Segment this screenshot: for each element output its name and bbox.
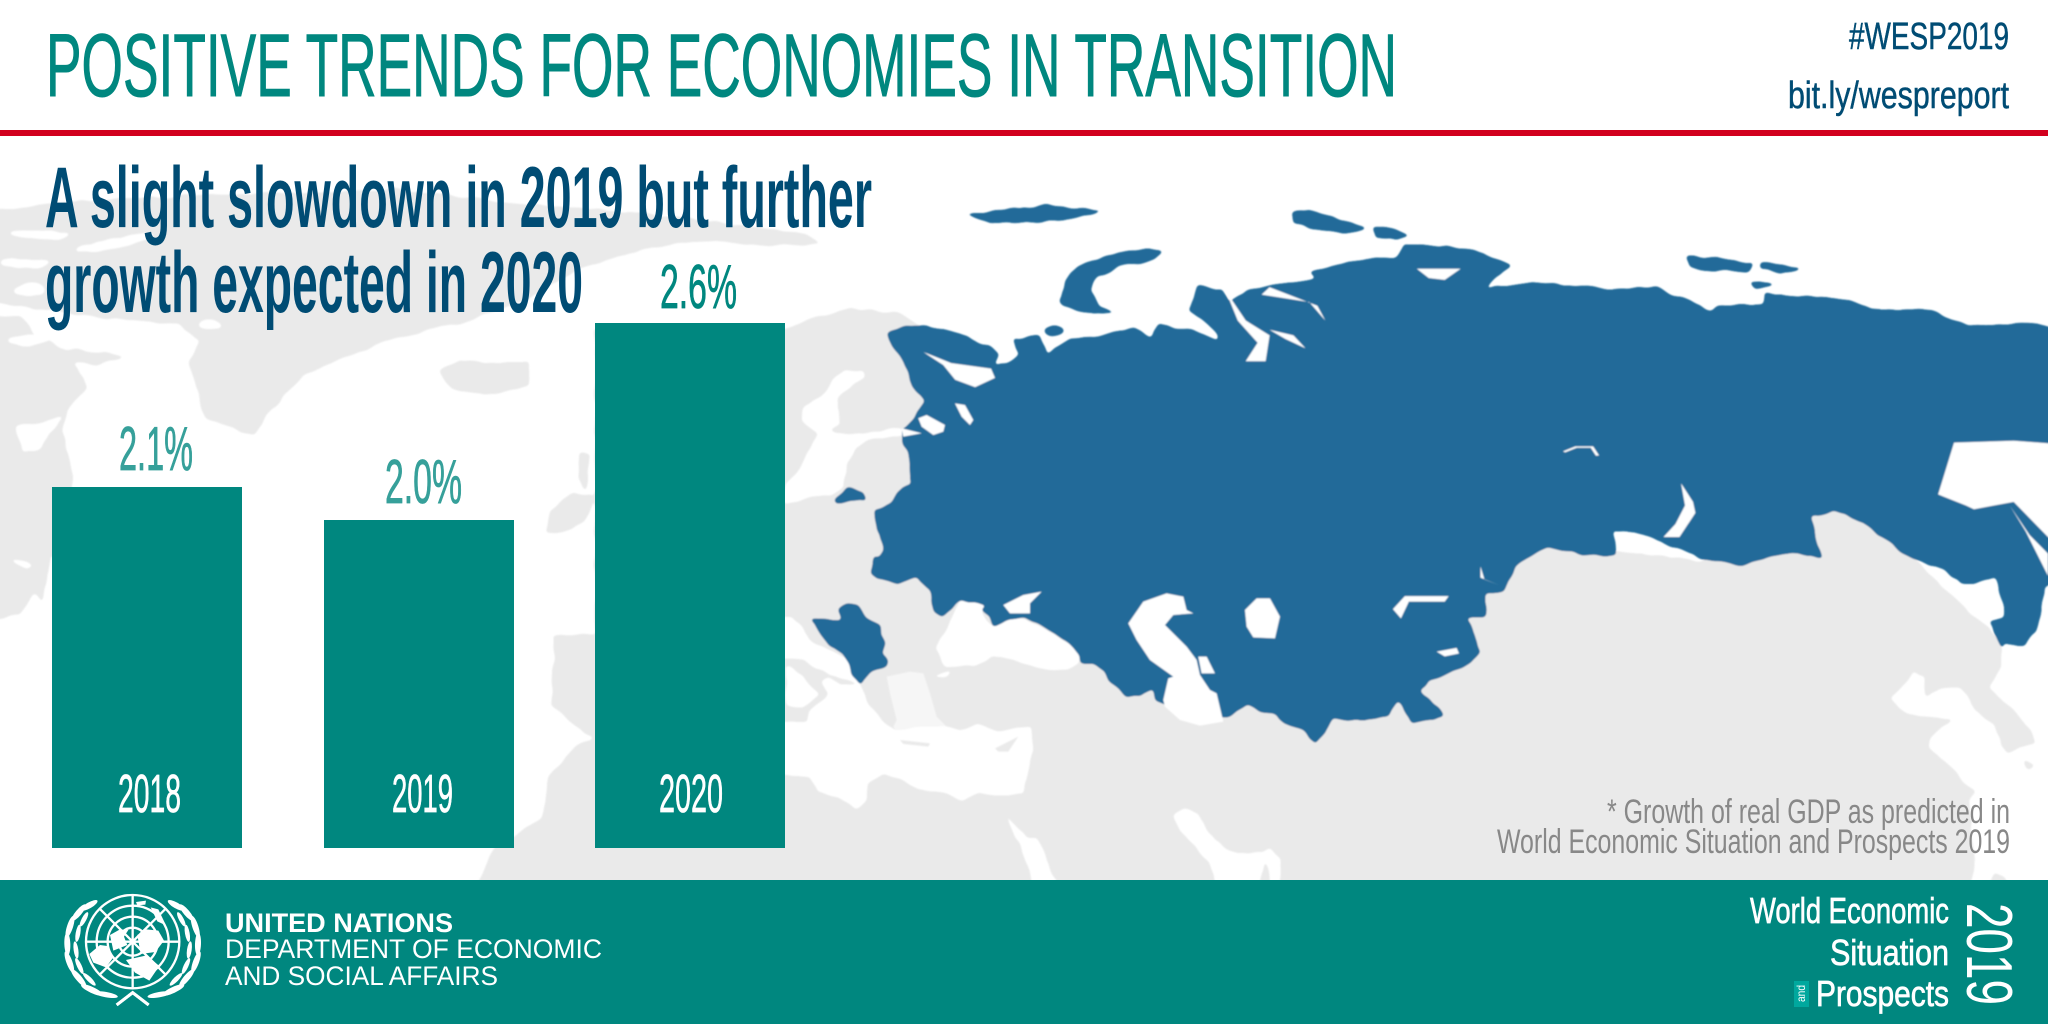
headline	[45, 150, 872, 331]
footer band	[0, 880, 2048, 1024]
bar 2019: 2019	[392, 764, 453, 824]
map: white seas and lakes over grey land	[0, 230, 1280, 893]
map: Aegean islands speckle	[887, 672, 947, 740]
bar 2020: 2020	[659, 764, 723, 824]
WESP logo	[1750, 890, 2026, 1014]
WESP logo: Prospects	[1816, 973, 1949, 1014]
background world map	[0, 190, 2048, 900]
bar 2019: 2.0%	[385, 448, 462, 517]
map: inland seas, lakes and coast cut-outs	[902, 269, 2048, 726]
UN DESA wordmark: DEPARTMENT OF ECONOMIC	[225, 934, 602, 964]
headline: growth expected in 2020	[45, 235, 583, 331]
bar 2018: 2.1%	[119, 415, 193, 484]
UN DESA wordmark: AND SOCIAL AFFAIRS	[225, 961, 498, 991]
WESP logo: and	[1794, 985, 1808, 1002]
bar 2020: 2.6%	[660, 253, 737, 322]
bar chart: GDP growth	[52, 253, 785, 848]
WESP logo: Situation	[1830, 932, 1949, 973]
icon: UN emblem	[63, 895, 203, 1005]
bar 2018	[52, 415, 242, 848]
UN DESA wordmark	[225, 908, 602, 991]
bar 2018: 2018	[118, 764, 181, 824]
map: transition economies in blue	[808, 204, 2048, 744]
map: grey islands on white seas	[900, 737, 1018, 752]
red divider	[0, 130, 2048, 136]
map: grey land	[0, 190, 2035, 900]
UN DESA wordmark: UNITED NATIONS	[225, 908, 453, 938]
headline: A slight slowdown in 2019 but further	[45, 150, 872, 246]
footnote	[1497, 793, 2010, 861]
bar 2019	[324, 448, 514, 848]
bar 2020	[595, 253, 785, 848]
WESP logo: World Economic	[1750, 890, 1949, 931]
